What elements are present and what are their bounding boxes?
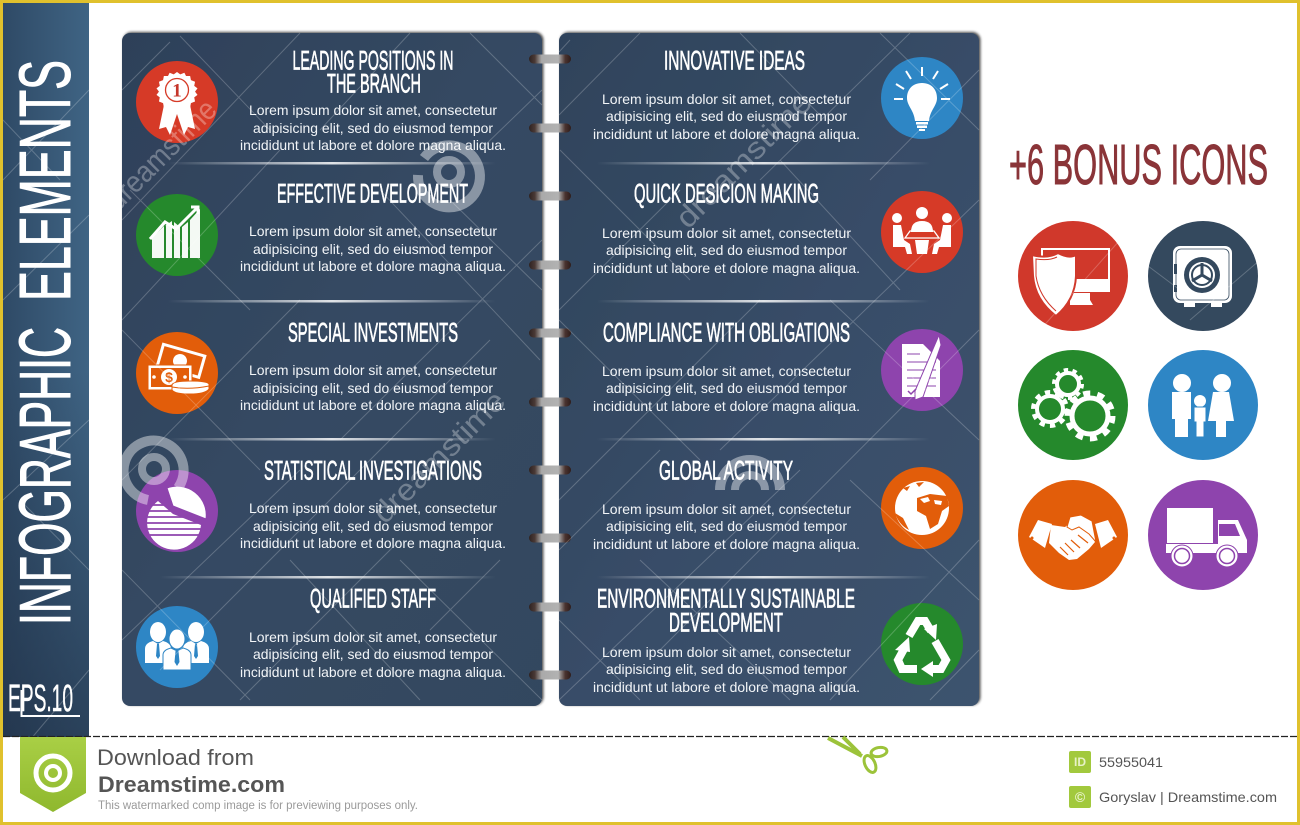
icon: team — [136, 606, 218, 688]
body text: adipisicing elit, sed do eiusmod tempor — [253, 518, 493, 534]
body text: adipisicing elit, sed do eiusmod tempor — [606, 518, 847, 534]
bonus icon: gears — [1018, 350, 1128, 460]
icon: pie chart — [136, 470, 218, 552]
id badge: ID — [1074, 755, 1086, 769]
body text: Lorem ipsum dolor sit amet, consectetur — [602, 363, 851, 379]
body text — [593, 363, 860, 414]
watermark text: dreamstime — [670, 86, 819, 235]
bonus icon: family — [1148, 350, 1258, 460]
body text: incididunt ut labore et dolore magna aliqua. — [593, 260, 860, 276]
copyright badge — [1069, 786, 1091, 808]
icon: award rosette — [136, 61, 218, 143]
body text — [593, 644, 860, 695]
separators — [160, 162, 930, 578]
heading: DEVELOPMENT — [669, 608, 783, 638]
heading: EFFECTIVE DEVELOPMENT — [277, 178, 468, 208]
body text — [593, 91, 860, 142]
body text: incididunt ut labore et dolore magna aliqua. — [593, 126, 860, 142]
sidebar title: INFOGRAPHIC — [6, 327, 86, 625]
body text: incididunt ut labore et dolore magna aliqua. — [593, 398, 860, 414]
heading: SPECIAL INVESTMENTS — [288, 318, 458, 348]
heading: THE BRANCH — [327, 68, 421, 98]
icon: award rosette: 1 — [172, 80, 182, 102]
body text: adipisicing elit, sed do eiusmod tempor — [253, 241, 493, 257]
icon: meeting — [881, 191, 963, 273]
body text: Lorem ipsum dolor sit amet, consectetur — [602, 644, 851, 660]
watermark text — [100, 86, 819, 530]
item: global activity — [593, 456, 963, 552]
heading: GLOBAL ACTIVITY — [659, 456, 793, 486]
download text — [97, 745, 418, 812]
author credit: Goryslav | Dreamstime.com — [1099, 789, 1277, 805]
body text — [593, 501, 860, 552]
watermark text: dreamstime — [100, 93, 223, 217]
download text: Download from — [97, 745, 254, 770]
item: environmentally sustainable — [593, 584, 963, 695]
binder rings — [529, 54, 571, 680]
heading: COMPLIANCE WITH OBLIGATIONS — [603, 318, 850, 348]
icon: growth chart — [136, 194, 218, 276]
body text: Lorem ipsum dolor sit amet, consectetur — [249, 102, 497, 118]
icon: recycle — [881, 603, 963, 685]
icon: globe — [881, 467, 963, 549]
download text: This watermarked comp image is for previewing purposes only. — [98, 800, 418, 812]
heading — [292, 46, 454, 98]
body text: incididunt ut labore et dolore magna aliqua. — [240, 137, 506, 153]
image id: 55955041 — [1099, 754, 1163, 770]
body text: Lorem ipsum dolor sit amet, consectetur — [602, 91, 851, 107]
body text: Lorem ipsum dolor sit amet, consectetur — [602, 225, 851, 241]
body text: incididunt ut labore et dolore magna aliqua. — [240, 535, 506, 551]
body text: adipisicing elit, sed do eiusmod tempor — [253, 120, 493, 136]
body text: adipisicing elit, sed do eiusmod tempor — [606, 108, 847, 124]
EPS 10 badge: EPS.10 — [8, 678, 73, 720]
notebook panel left — [122, 33, 542, 706]
body text: incididunt ut labore et dolore magna aliqua. — [593, 679, 860, 695]
item: quick decision making — [593, 178, 963, 276]
body text: Lorem ipsum dolor sit amet, consectetur — [602, 501, 851, 517]
watermark text: dreamstime — [367, 384, 512, 530]
body text: adipisicing elit, sed do eiusmod tempor — [253, 380, 493, 396]
heading: STATISTICAL INVESTIGATIONS — [264, 456, 482, 486]
body text: adipisicing elit, sed do eiusmod tempor — [606, 380, 847, 396]
spiral logo — [36, 756, 70, 790]
item: compliance — [593, 318, 963, 414]
body text — [240, 362, 506, 413]
dreamstime badge — [20, 737, 86, 812]
item: statistical investigations — [136, 456, 506, 552]
body text: Lorem ipsum dolor sit amet, consectetur — [249, 362, 497, 378]
id badge — [1069, 751, 1091, 773]
body text — [240, 223, 506, 274]
body text — [240, 500, 506, 551]
scissors — [828, 737, 888, 774]
body text: incididunt ut labore et dolore magna aliqua. — [240, 397, 506, 413]
item: special investments — [136, 318, 506, 414]
item: leading positions — [136, 46, 506, 153]
body text — [593, 225, 860, 276]
item: qualified staff — [136, 584, 506, 688]
body text: adipisicing elit, sed do eiusmod tempor — [606, 242, 847, 258]
icon: document and pen — [881, 329, 963, 411]
watermark spirals — [124, 145, 780, 500]
dashed cut line — [3, 736, 1297, 738]
item: innovative ideas — [593, 46, 963, 142]
body text: Lorem ipsum dolor sit amet, consectetur — [249, 629, 497, 645]
heading: LEADING POSITIONS IN — [292, 46, 454, 76]
copyright badge: © — [1075, 789, 1086, 805]
icon: money — [136, 332, 218, 414]
body text — [240, 102, 506, 153]
icon: money: $ — [165, 369, 173, 385]
heading: QUALIFIED STAFF — [310, 584, 436, 614]
notebook panel right — [559, 33, 979, 706]
body text: incididunt ut labore et dolore magna aliqua. — [240, 664, 506, 680]
download text: Dreamstime.com — [98, 772, 285, 797]
bonus icon: handshake — [1018, 480, 1128, 590]
body text: adipisicing elit, sed do eiusmod tempor — [606, 661, 847, 677]
heading — [597, 584, 855, 638]
body text: adipisicing elit, sed do eiusmod tempor — [253, 646, 493, 662]
body text — [240, 629, 506, 680]
sidebar — [3, 3, 89, 737]
body text: Lorem ipsum dolor sit amet, consectetur — [249, 223, 497, 239]
EPS 10 badge — [8, 678, 80, 720]
heading: ENVIRONMENTALLY SUSTAINABLE — [597, 584, 855, 614]
heading: QUICK DESICION MAKING — [634, 178, 819, 208]
heading: INNOVATIVE IDEAS — [664, 46, 805, 76]
bonus icon: truck — [1148, 480, 1258, 590]
body text: incididunt ut labore et dolore magna aliqua. — [593, 536, 860, 552]
bonus icon: safe — [1148, 221, 1258, 331]
icon: light bulb — [881, 57, 963, 139]
item: effective development — [136, 178, 506, 276]
body text: Lorem ipsum dolor sit amet, consectetur — [249, 500, 497, 516]
body text: incididunt ut labore et dolore magna aliqua. — [240, 258, 506, 274]
bonus icon: shield and monitor — [1018, 221, 1128, 331]
